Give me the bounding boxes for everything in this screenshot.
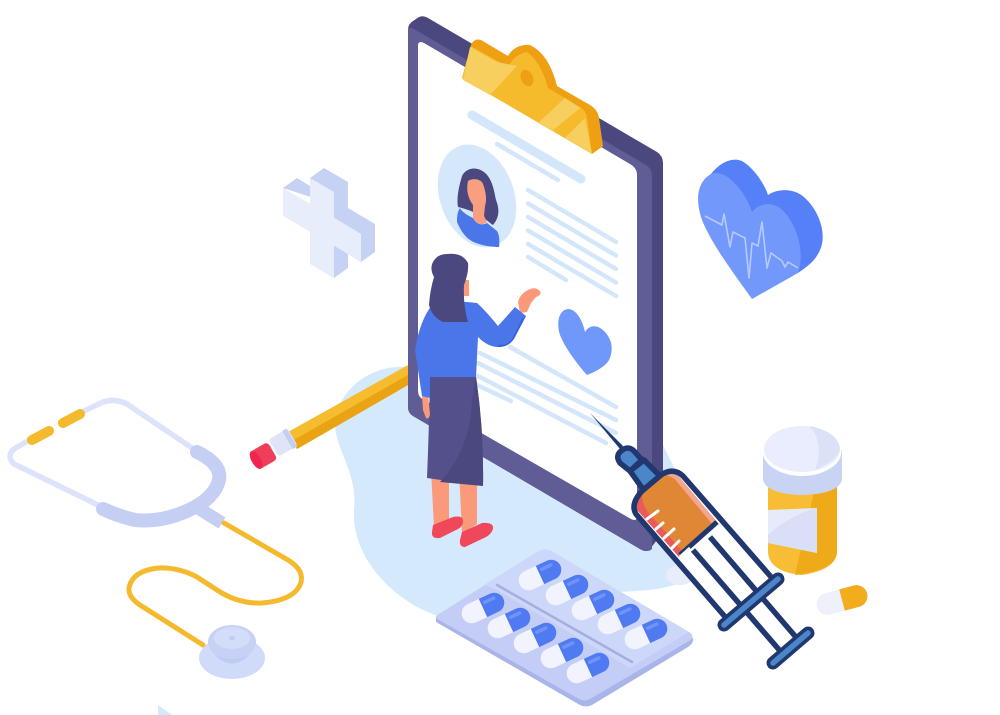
clipboard board back — [408, 16, 663, 551]
floating heart with pulse — [698, 160, 823, 299]
clipboard board front — [408, 28, 652, 551]
divider — [497, 585, 632, 662]
medicine bottle — [666, 426, 842, 585]
small heart icon — [558, 309, 612, 375]
stethoscope yoke — [103, 452, 219, 520]
woman figure — [415, 254, 540, 547]
bottle cap — [763, 450, 842, 495]
raised hand — [518, 288, 540, 313]
needle — [590, 413, 623, 449]
stethoscope — [10, 400, 301, 645]
bottle label — [768, 508, 817, 553]
clipboard paper — [418, 42, 637, 520]
plunger rods — [693, 550, 781, 652]
bottle body — [768, 480, 837, 575]
document body lines — [477, 190, 616, 443]
needle hub — [618, 448, 642, 471]
loose capsule — [814, 583, 870, 617]
plunger head — [773, 633, 808, 663]
floating cross — [283, 168, 375, 278]
barrel — [634, 471, 772, 619]
syringe nozzle — [630, 460, 662, 492]
measure ticks — [647, 511, 690, 557]
neck — [462, 280, 469, 296]
chest piece — [199, 625, 265, 679]
legs — [431, 470, 449, 527]
fluid left highlight — [636, 493, 682, 557]
yellow tube — [129, 523, 301, 645]
pulse line — [705, 214, 798, 278]
document heading lines — [472, 115, 581, 180]
capsules — [515, 556, 565, 594]
hair — [429, 254, 468, 322]
small corner mark — [158, 705, 172, 715]
fluid right highlight — [668, 473, 717, 525]
syringe — [590, 413, 808, 663]
clipboard clip — [462, 40, 603, 154]
barrel outline — [634, 471, 772, 619]
blouse — [415, 302, 526, 398]
pack face — [436, 550, 692, 700]
skirt — [427, 377, 483, 486]
background blob — [335, 367, 700, 618]
pack highlight — [484, 550, 689, 668]
avatar portrait — [424, 134, 530, 258]
earpieces — [63, 414, 80, 423]
pack edge — [436, 617, 693, 706]
clipboard — [408, 16, 663, 551]
pill blister pack — [436, 550, 693, 706]
fluid — [637, 474, 717, 556]
pencil — [247, 365, 408, 471]
hand on left — [422, 394, 430, 418]
finger flange — [724, 579, 778, 625]
shoes — [432, 516, 463, 538]
ear tubes — [80, 400, 195, 450]
